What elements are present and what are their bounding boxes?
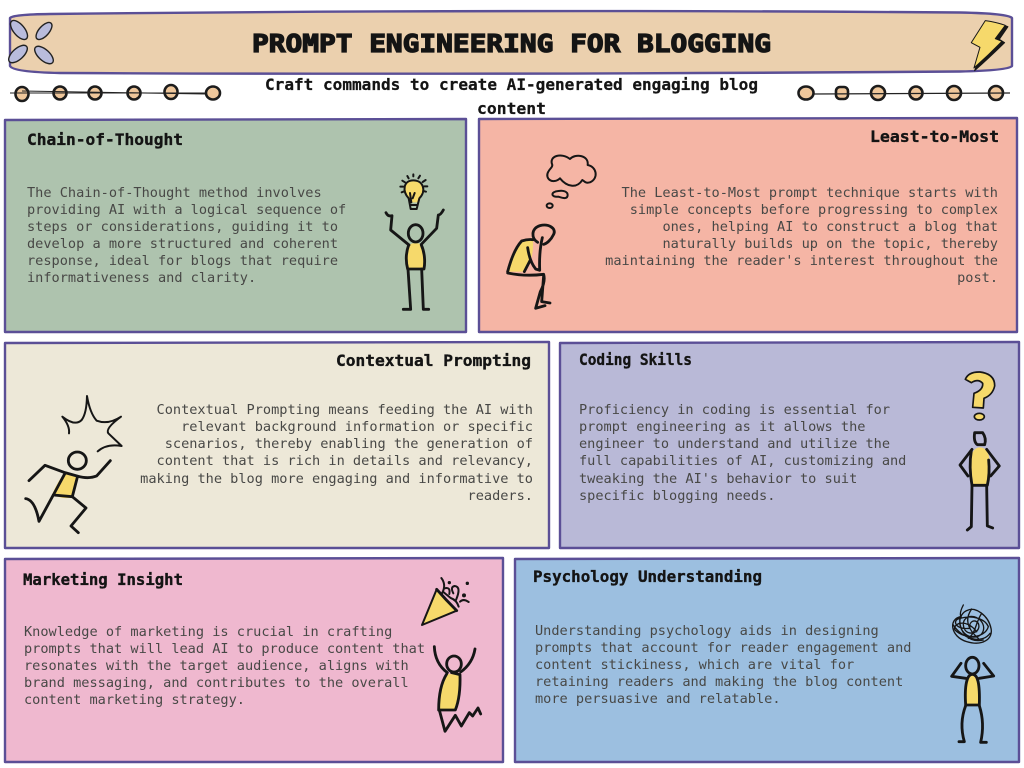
panel: Psychology Understanding bbox=[515, 558, 1019, 762]
body text: Proficiency in coding is essential for bbox=[579, 402, 890, 418]
decoration: right bead string bbox=[798, 86, 1010, 100]
panel: Contextual Prompting bbox=[5, 342, 549, 548]
body text bbox=[605, 185, 998, 286]
subtitle: content bbox=[477, 99, 546, 118]
subtitle bbox=[265, 75, 758, 118]
icon: party popper and jumping figure bbox=[422, 578, 481, 731]
body text: engineer to understand and utilize the bbox=[579, 436, 890, 452]
heading: Least-to-Most bbox=[870, 127, 999, 146]
icon: lightning bolt bbox=[971, 21, 1008, 71]
heading: Coding Skills bbox=[579, 350, 692, 369]
body text: ones, helping AI to construct a blog that bbox=[662, 219, 998, 235]
body text: content stickiness, which are vital for bbox=[535, 657, 854, 673]
body text: response, ideal for blogs that require bbox=[27, 253, 338, 269]
icon: figure with question mark bbox=[960, 372, 999, 530]
body text: Understanding psychology aids in designing bbox=[535, 623, 879, 639]
body text: readers. bbox=[468, 488, 533, 504]
body text: The Least-to-Most prompt technique starts with bbox=[622, 185, 998, 201]
body text: The Chain-of-Thought method involves bbox=[27, 185, 322, 201]
icon: four petals bbox=[6, 18, 56, 67]
panel: Coding Skills bbox=[560, 342, 1019, 548]
icon: figure with light bulb bbox=[386, 174, 443, 309]
body text bbox=[579, 402, 906, 504]
body text: content marketing strategy. bbox=[24, 692, 245, 708]
icon: thinking figure bbox=[508, 156, 596, 308]
heading: Contextual Prompting bbox=[336, 351, 531, 370]
body text bbox=[27, 185, 346, 286]
body text bbox=[535, 623, 911, 707]
body text: full capabilities of AI, customizing and bbox=[579, 453, 906, 469]
panel: Least-to-Most bbox=[479, 118, 1017, 332]
body text: develop a more structured and coherent bbox=[27, 236, 338, 252]
heading: Chain-of-Thought bbox=[27, 130, 183, 149]
body text: resonates with the target audience, aligns with bbox=[24, 658, 409, 674]
body text: content that is rich in details and relevancy, bbox=[157, 453, 533, 469]
panel: Chain-of-Thought bbox=[5, 119, 466, 332]
body text: informativeness and clarity. bbox=[27, 270, 256, 286]
body text: more persuasive and relatable. bbox=[535, 691, 781, 707]
body text: providing AI with a logical sequence of bbox=[27, 202, 346, 218]
body text: making the blog more engaging and informative to bbox=[140, 471, 533, 487]
icon: running figure with burst bbox=[26, 396, 122, 533]
body text: post. bbox=[957, 270, 998, 286]
body text: naturally builds up on the topic, thereby bbox=[662, 236, 998, 252]
body text: brand messaging, and contributes to the overall bbox=[24, 675, 409, 691]
panel: Marketing Insight bbox=[5, 558, 503, 762]
body text: prompt engineering as it allows the bbox=[579, 419, 865, 435]
body text: prompts that will lead AI to produce content that bbox=[24, 641, 425, 657]
body text: simple concepts before progressing to complex bbox=[630, 202, 998, 218]
body text: prompts that account for reader engagement and bbox=[535, 640, 911, 656]
body text: relevant background information or specific bbox=[181, 419, 533, 435]
body text: steps or considerations, guiding it to bbox=[27, 219, 338, 235]
body text: retaining readers and making the blog content bbox=[535, 674, 903, 690]
title banner bbox=[6, 11, 1012, 74]
body text: scenarios, thereby enabling the generation of bbox=[165, 436, 533, 452]
body text bbox=[24, 624, 425, 708]
body text: maintaining the reader's interest throughout the bbox=[605, 253, 998, 269]
icon: figure with scribble bbox=[952, 605, 994, 742]
body text bbox=[140, 402, 533, 504]
body text: Knowledge of marketing is crucial in crafting bbox=[24, 624, 392, 640]
title text: PROMPT ENGINEERING FOR BLOGGING bbox=[252, 29, 771, 58]
heading: Psychology Understanding bbox=[533, 567, 762, 586]
subtitle: Craft commands to create AI-generated engaging blog bbox=[265, 75, 758, 94]
heading: Marketing Insight bbox=[23, 570, 183, 589]
body text: Contextual Prompting means feeding the AI with bbox=[157, 402, 533, 418]
decoration: left bead string bbox=[10, 85, 220, 101]
body text: specific blogging needs. bbox=[579, 488, 775, 504]
body text: tweaking the AI's behavior to suit bbox=[579, 471, 857, 487]
